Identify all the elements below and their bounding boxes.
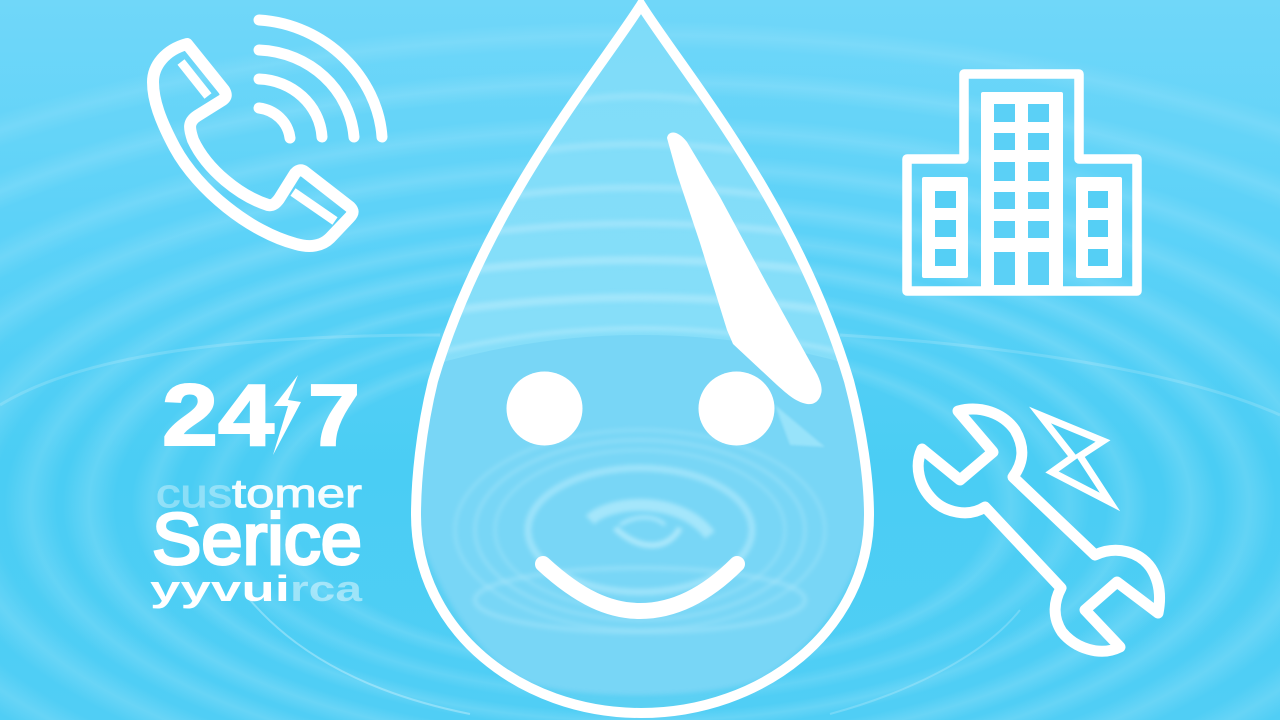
- drop body: [416, 5, 869, 713]
- text: customer: cus: [156, 472, 232, 516]
- icon: wrench and spark: [918, 409, 1160, 651]
- heading: 24/7: [162, 367, 360, 464]
- icon: lightning slash: [273, 375, 301, 455]
- heading: 24/7: 24: [162, 367, 274, 464]
- left eye: [506, 372, 582, 446]
- left wing: [922, 177, 968, 278]
- signal waves: [259, 20, 382, 138]
- text: service: Serice: [152, 500, 362, 580]
- text: garbled line: [150, 568, 363, 609]
- text: garbled line: yyvui: [150, 568, 290, 609]
- text: garbled line: rca: [290, 568, 363, 609]
- text: customer: tomer: [232, 472, 362, 516]
- text: customer: [156, 472, 362, 516]
- water drop character: [416, 5, 869, 713]
- drop highlight: [667, 132, 822, 404]
- right eye: [698, 372, 774, 446]
- smile: [543, 564, 737, 611]
- icon: phone with signal waves: [153, 20, 382, 246]
- heading: 24/7: 7: [308, 367, 360, 464]
- text block: 24/7 customer service: [150, 367, 363, 609]
- faint ripple arcs: [0, 335, 1280, 714]
- spark: [1040, 415, 1110, 502]
- right wing: [1076, 177, 1122, 278]
- central tower: [981, 92, 1063, 289]
- icon: office buildings: [907, 74, 1137, 291]
- handset: [153, 44, 353, 246]
- wrench: [918, 409, 1160, 651]
